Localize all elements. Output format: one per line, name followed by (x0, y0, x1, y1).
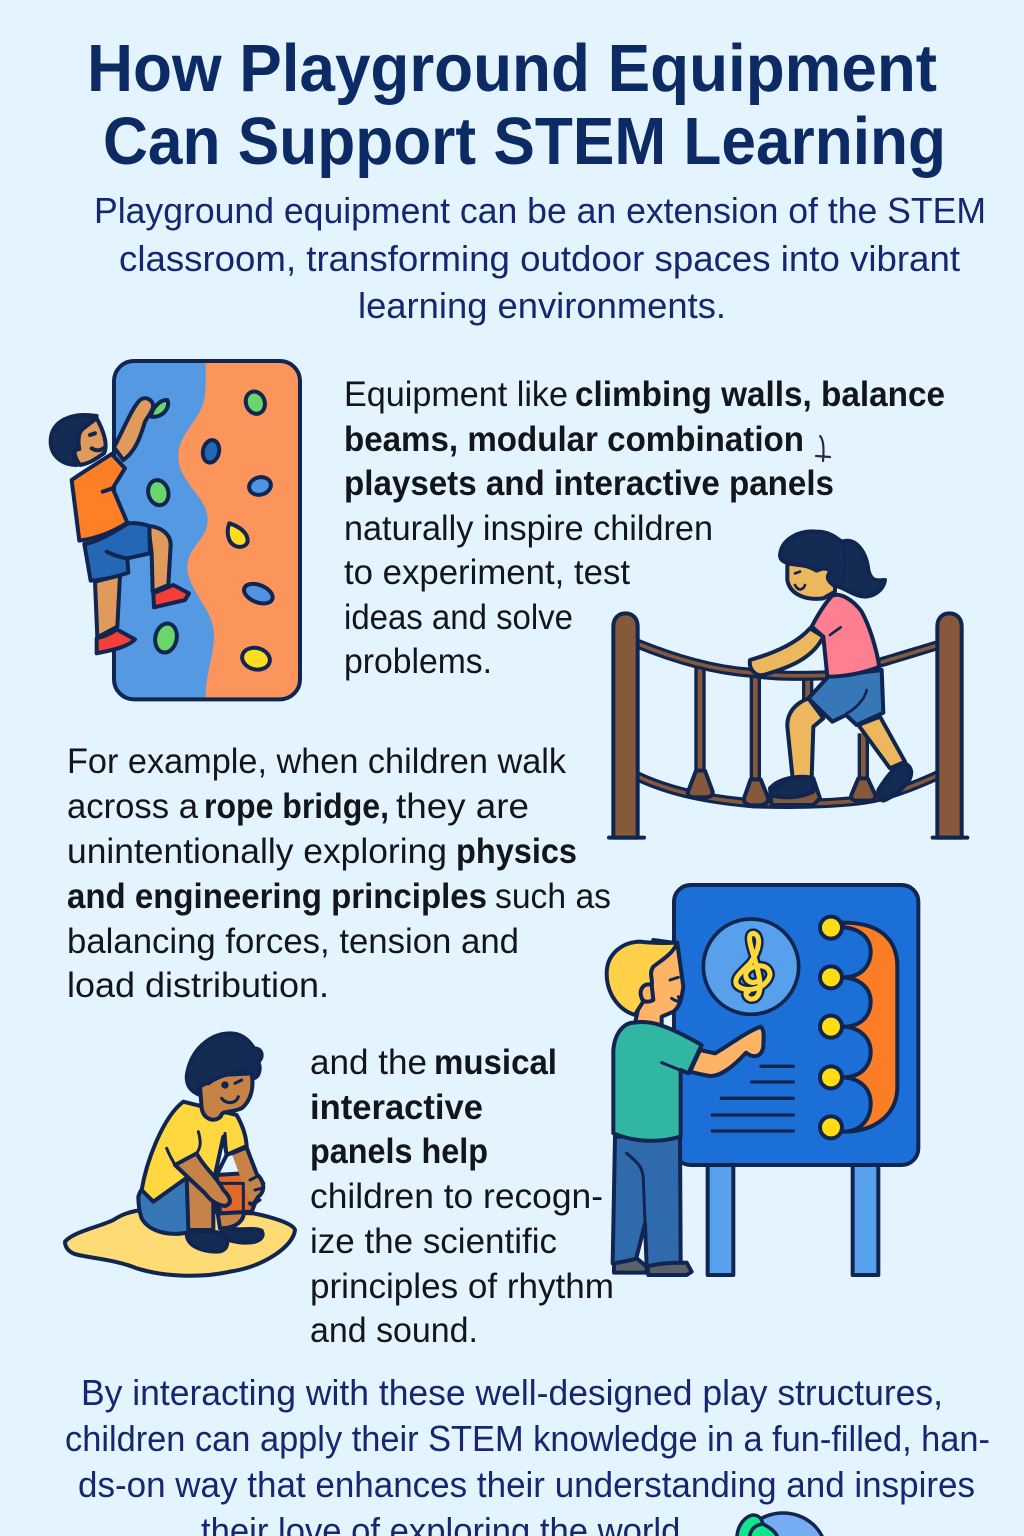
paragraph: rope bridge: unintentionally exploring (67, 832, 447, 871)
bridge posts (609, 613, 967, 838)
paragraph: musical panels: interactive (310, 1088, 483, 1127)
closing text (65, 1372, 990, 1536)
paragraph: rope bridge: such as (495, 877, 611, 916)
climbing holds (145, 389, 275, 672)
paragraph: musical panels: and the (310, 1043, 427, 1082)
paragraph: musical panels (310, 1043, 614, 1350)
icon: climbing wall with child (51, 361, 300, 699)
paragraph: rope bridge: load distribution. (67, 966, 329, 1005)
icon: rope bridge with girl (609, 531, 967, 838)
paragraph: musical panels: ize the scientific (310, 1222, 557, 1261)
panel board (674, 885, 918, 1165)
closing text: ds-on way that enhances their understanding and inspires (78, 1464, 975, 1505)
panel legs (708, 1160, 878, 1275)
icon: child playing in sand (65, 1033, 295, 1276)
intro text: classroom, transforming outdoor spaces into vibrant (119, 238, 960, 279)
intro text: Playground equipment can be an extension of the STEM (94, 190, 986, 231)
intro text (94, 190, 986, 326)
title: How Playground Equipment (87, 31, 937, 106)
sand (65, 1210, 295, 1276)
paragraph: musical panels: panels help (310, 1132, 488, 1171)
intro text: learning environments. (358, 285, 726, 326)
scalloped orange connector (843, 923, 897, 1132)
paragraph: rope bridge: physics (456, 832, 577, 871)
paragraph: rope bridge: and engineering principles (67, 877, 487, 916)
paragraph: equipment (344, 375, 945, 681)
paragraph: musical panels: musical (434, 1043, 557, 1082)
boy (607, 940, 764, 1275)
paragraph: equipment: ideas and solve (344, 598, 573, 637)
paragraph: equipment: beams, modular combination (344, 420, 804, 459)
paragraph: rope bridge (67, 742, 611, 1005)
climber (51, 398, 189, 653)
paragraph: rope bridge: rope bridge, (204, 787, 389, 826)
paragraph: musical panels: principles of rhythm (310, 1267, 614, 1306)
icon: musical panel with boy (607, 885, 918, 1275)
paragraph: rope bridge: they are (396, 787, 529, 826)
wall (114, 361, 300, 699)
paragraph: rope bridge: balancing forces, tension and (67, 922, 519, 961)
music note circle (703, 919, 799, 1014)
closing text: By interacting with these well-designed play structures, (81, 1372, 943, 1413)
icon: small stray arrow (816, 436, 830, 461)
paragraph: equipment: problems. (344, 642, 492, 681)
bridge ropes (637, 643, 938, 804)
girl (750, 531, 911, 805)
yellow buttons (820, 917, 842, 1138)
paragraph: equipment: Equipment like (344, 375, 568, 414)
icon: globe (737, 1513, 826, 1536)
paragraph: equipment: to experiment, test (344, 553, 630, 592)
paragraph: equipment: naturally inspire children (344, 509, 713, 548)
panel text lines (712, 1066, 793, 1131)
title (87, 31, 946, 179)
paragraph: musical panels: and sound. (310, 1311, 478, 1350)
paragraph: equipment: playsets and interactive panels (344, 464, 834, 503)
paragraph: musical panels: children to recogn- (310, 1177, 603, 1216)
child (138, 1033, 263, 1252)
paragraph: rope bridge: across a (67, 787, 199, 826)
closing text: children can apply their STEM knowledge in a fun-filled, han- (65, 1418, 990, 1459)
paragraph: rope bridge: For example, when children walk (67, 742, 566, 781)
paragraph: equipment: climbing walls, balance (575, 375, 945, 414)
title: Can Support STEM Learning (103, 104, 946, 179)
